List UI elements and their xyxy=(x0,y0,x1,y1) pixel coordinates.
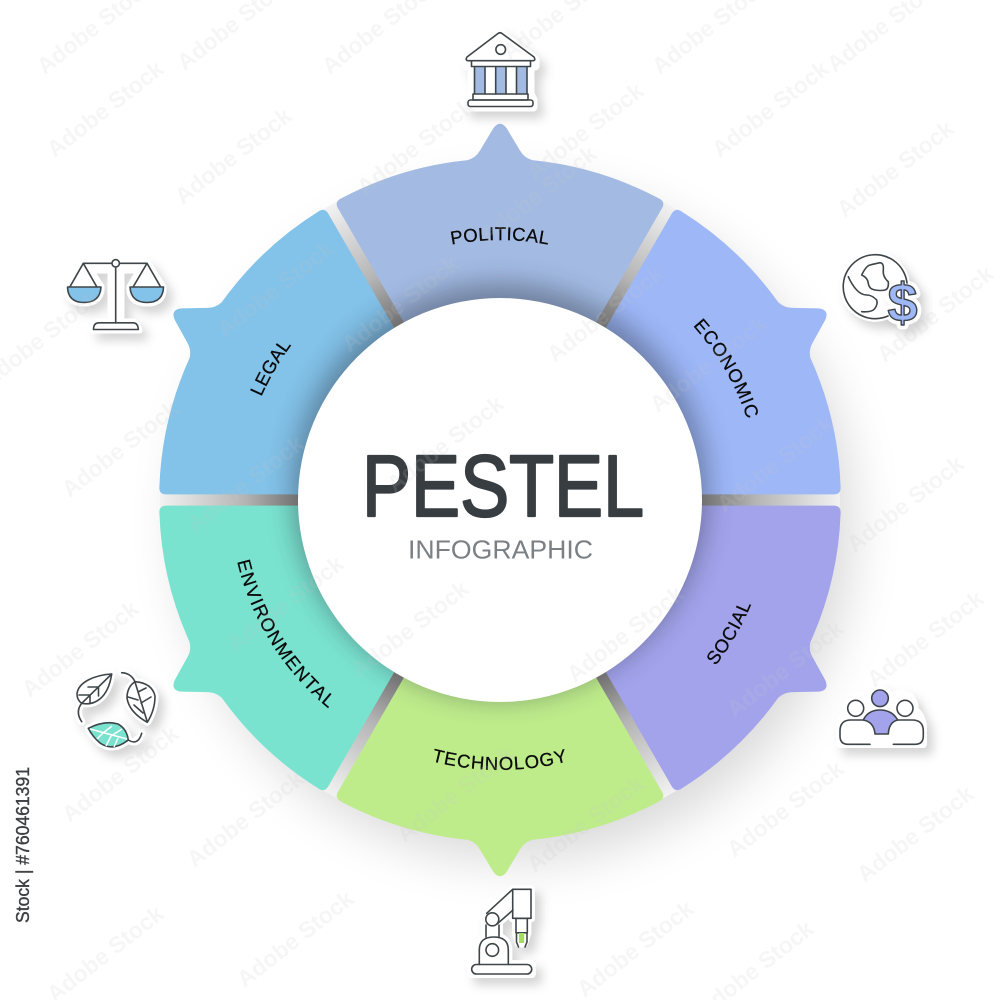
watermark pattern: Adobe Stock xyxy=(872,260,999,367)
watermark pattern: Adobe Stock xyxy=(852,780,979,887)
subtitle: INFOGRAPHIC xyxy=(408,534,593,564)
watermark pattern: Adobe Stock xyxy=(232,885,359,992)
watermark pattern: Adobe Stock xyxy=(182,765,309,872)
icon: globe with dollar: $ xyxy=(887,273,918,333)
watermark pattern: Adobe Stock xyxy=(645,310,772,417)
panel: political segment xyxy=(337,124,663,332)
panel: social segment xyxy=(564,442,908,830)
watermark pattern: Adobe Stock xyxy=(542,260,669,367)
watermark pattern: Adobe Stock xyxy=(347,575,474,682)
watermark pattern: Adobe Stock xyxy=(522,77,649,184)
watermark pattern: Adobe Stock xyxy=(562,580,689,687)
inner shadow cast by centre circle xyxy=(292,283,708,699)
icon: justice scales xyxy=(67,260,164,330)
watermark pattern: Adobe Stock xyxy=(352,93,479,200)
icon: social people xyxy=(840,690,923,744)
watermark pattern: Adobe Stock xyxy=(392,740,519,847)
watermark pattern: Adobe Stock xyxy=(842,450,969,557)
watermark pattern: Adobe Stock xyxy=(475,140,602,247)
label: legal: LEGAL xyxy=(250,343,292,396)
panel: legal segment xyxy=(92,170,436,558)
title: PESTEL xyxy=(362,438,644,535)
watermark pattern: Adobe Stock xyxy=(722,755,849,862)
centre circle xyxy=(298,298,702,702)
icon: globe with dollar xyxy=(840,252,918,333)
watermark pattern: Adobe Stock xyxy=(57,395,184,502)
watermark pattern: Adobe Stock xyxy=(212,235,339,342)
watermark pattern: Adobe Stock xyxy=(522,770,649,877)
icon: globe with dollar: $ xyxy=(887,273,918,333)
label: technology: TECHNOLOGY xyxy=(434,748,565,770)
watermark pattern: Adobe Stock xyxy=(832,115,959,222)
watermark pattern: Adobe Stock xyxy=(722,615,849,722)
watermark pattern: Adobe Stock xyxy=(170,102,297,209)
watermark pattern: Adobe Stock xyxy=(182,430,309,537)
icon: robotic arm xyxy=(472,889,532,974)
watermark pattern: Adobe Stock xyxy=(572,895,699,1000)
watermark pattern: Adobe Stock xyxy=(862,585,989,692)
label: economic: ECONOMIC xyxy=(694,318,758,418)
gap backing disc xyxy=(160,160,840,840)
label: environmental: ENVIRONMENTAL xyxy=(237,560,332,708)
icon: three leaves xyxy=(77,673,155,747)
icon: government building xyxy=(466,33,535,107)
panel: technology segment xyxy=(337,668,663,876)
watermark pattern: Adobe Stock xyxy=(222,550,349,657)
watermark pattern: Adobe Stock xyxy=(382,390,509,497)
panel: environmental segment xyxy=(92,442,436,830)
watermark pattern: Adobe Stock xyxy=(337,250,464,357)
label: political: POLITICAL xyxy=(450,227,548,245)
label: social: SOCIAL xyxy=(707,604,752,664)
stock id text: Stock | #760461391 xyxy=(13,767,33,923)
watermark pattern: Adobe Stock xyxy=(707,55,834,162)
watermark pattern: Adobe Stock xyxy=(17,595,144,702)
watermark pattern: Adobe Stock xyxy=(42,55,169,162)
wheel drop shadow xyxy=(180,188,852,860)
watermark pattern: Adobe Stock xyxy=(57,720,184,827)
watermark pattern: Adobe Stock xyxy=(712,410,839,517)
panel: economic segment xyxy=(564,170,908,558)
